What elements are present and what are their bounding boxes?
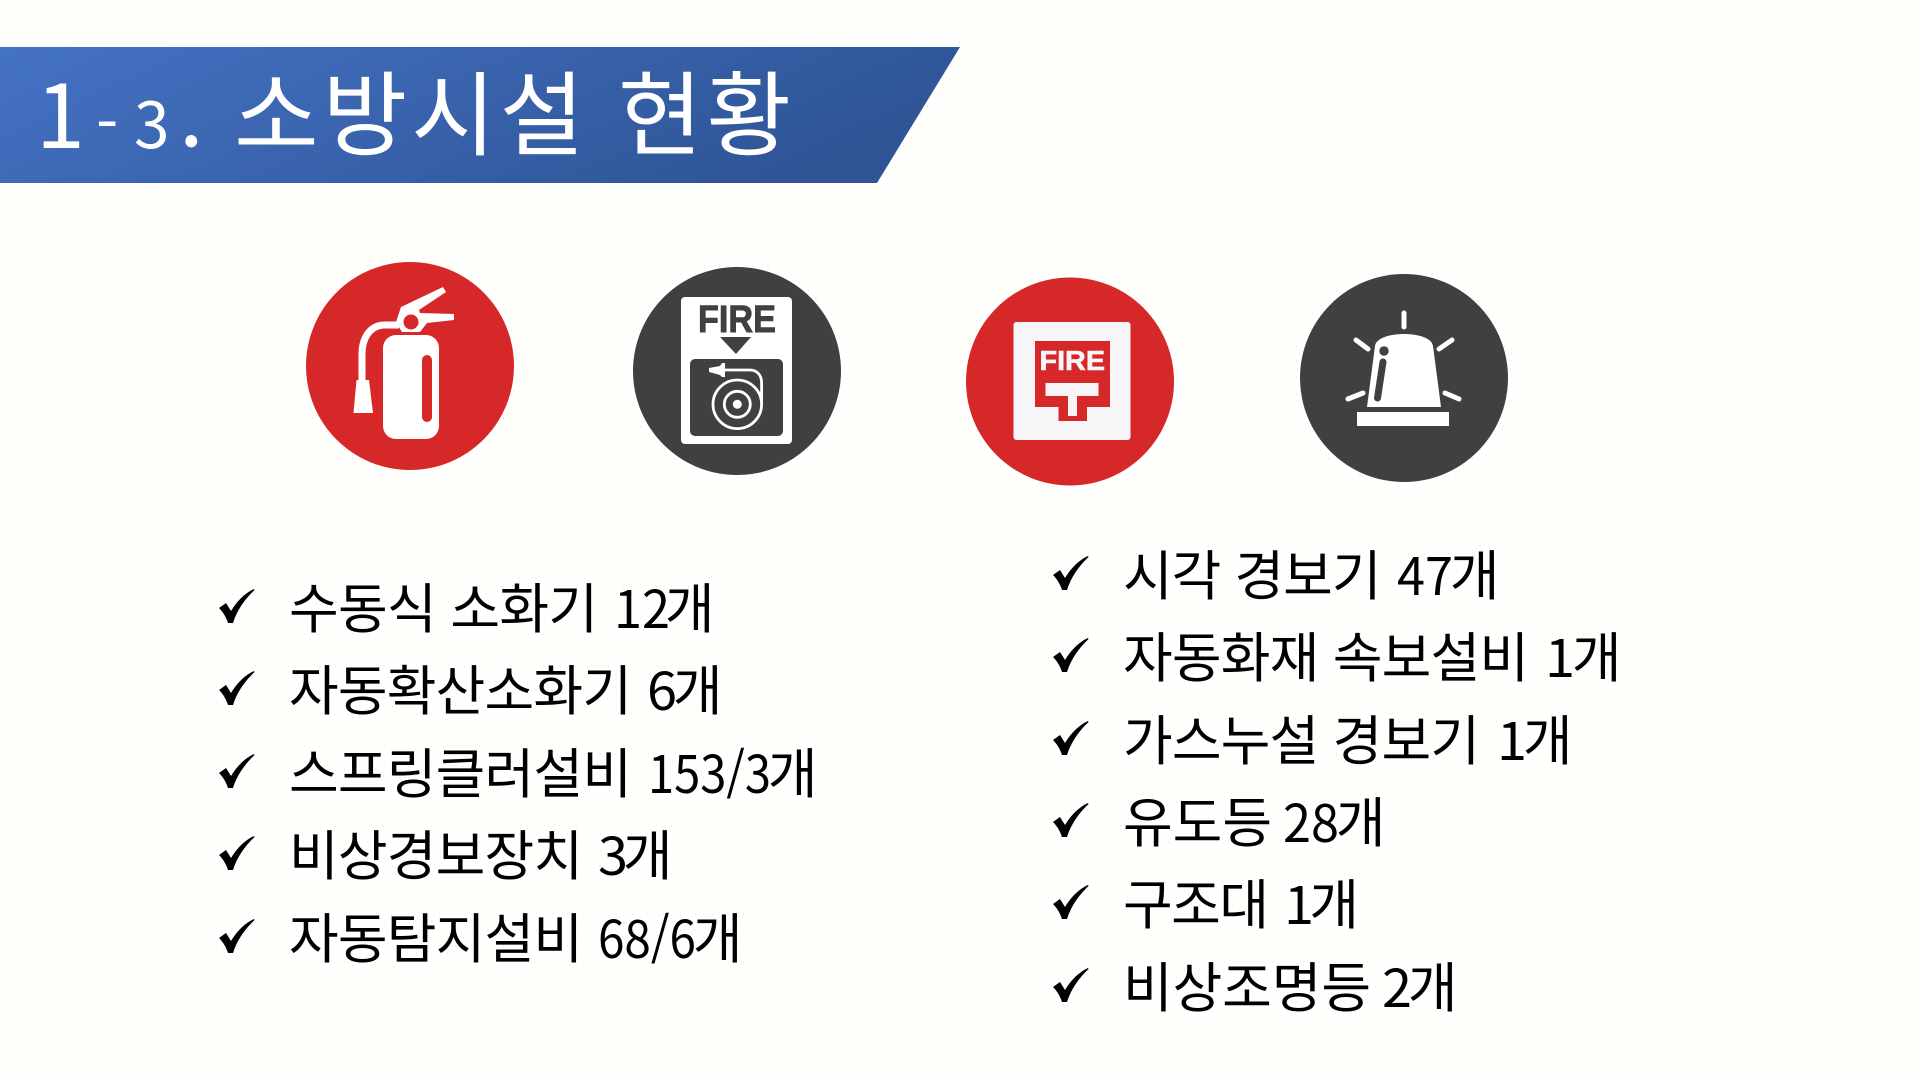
item: rescue tool: 개: [1309, 861, 1359, 940]
title text: 3: [134, 75, 170, 167]
title text: .: [179, 47, 204, 174]
title banner: [0, 42, 960, 183]
item: gas leak alarm: 1: [1497, 700, 1527, 775]
item: manual extinguisher: [219, 565, 714, 644]
item: automatic fire alarm: 자동화재 속보설비: [1123, 614, 1529, 693]
item: manual extinguisher: 12: [614, 568, 670, 643]
item: exit light: [1053, 779, 1386, 858]
item: emergency alarm: 비상경보장치: [289, 812, 583, 891]
item: sprinkler: [219, 730, 818, 809]
title text: 소방시설 현황: [234, 42, 791, 175]
item: gas leak alarm: 개: [1523, 697, 1572, 776]
icon: fire hose cabinet: [633, 267, 841, 475]
icon: warning beacon: [1300, 274, 1508, 482]
item: gas leak alarm: 가스누설 경보기: [1123, 697, 1480, 776]
list: right column: [1053, 532, 1622, 1023]
item: automatic detection: 자동탐지설비: [289, 895, 583, 974]
item: automatic detection: 68/6: [598, 898, 696, 973]
item: automatic fire alarm: 개: [1572, 614, 1622, 693]
item: emergency lighting: 개: [1408, 944, 1458, 1023]
item: visual alarm: 47: [1397, 535, 1453, 610]
title text: -: [96, 75, 118, 167]
item: automatic diffusion extinguisher: 개: [673, 647, 722, 726]
title text: 1: [36, 47, 85, 174]
item: emergency alarm: [219, 812, 672, 891]
item: automatic diffusion extinguisher: 6: [647, 650, 677, 725]
list: left column: [219, 565, 818, 974]
item: automatic detection: 개: [693, 895, 742, 974]
item: rescue tool: 구조대: [1123, 861, 1269, 940]
item: automatic detection: [219, 895, 742, 974]
item: sprinkler: 153/3: [648, 733, 771, 808]
item: gas leak alarm: [1053, 697, 1572, 776]
item: sprinkler: 스프링클러설비: [289, 730, 632, 809]
item: emergency alarm: 3: [598, 815, 628, 890]
item: automatic fire alarm: 1: [1545, 617, 1575, 692]
item: exit light: 개: [1336, 779, 1386, 858]
item: sprinkler: 개: [768, 730, 818, 809]
item: exit light: 28: [1283, 782, 1339, 857]
icon: fire extinguisher: [306, 262, 514, 470]
item: emergency lighting: 2: [1382, 947, 1412, 1022]
item: emergency lighting: [1053, 944, 1458, 1023]
item: rescue tool: 1: [1284, 864, 1314, 939]
icon: fire hose cabinet: FIRE: [698, 299, 776, 341]
item: rescue tool: [1053, 861, 1359, 940]
item: automatic diffusion extinguisher: 자동확산소화기: [289, 647, 632, 726]
item: emergency lighting: 비상조명등: [1123, 944, 1371, 1023]
item: automatic diffusion extinguisher: [219, 647, 722, 726]
item: manual extinguisher: 개: [665, 565, 714, 644]
item: visual alarm: [1053, 532, 1500, 611]
item: manual extinguisher: 수동식 소화기: [289, 565, 598, 644]
icon: manual fire alarm box: FIRE: [1040, 345, 1105, 376]
item: visual alarm: 시각 경보기: [1123, 532, 1382, 611]
item: exit light: 유도등: [1123, 779, 1272, 858]
item: visual alarm: 개: [1450, 532, 1500, 611]
item: emergency alarm: 개: [623, 812, 672, 891]
icon: manual fire alarm box: [966, 278, 1174, 486]
